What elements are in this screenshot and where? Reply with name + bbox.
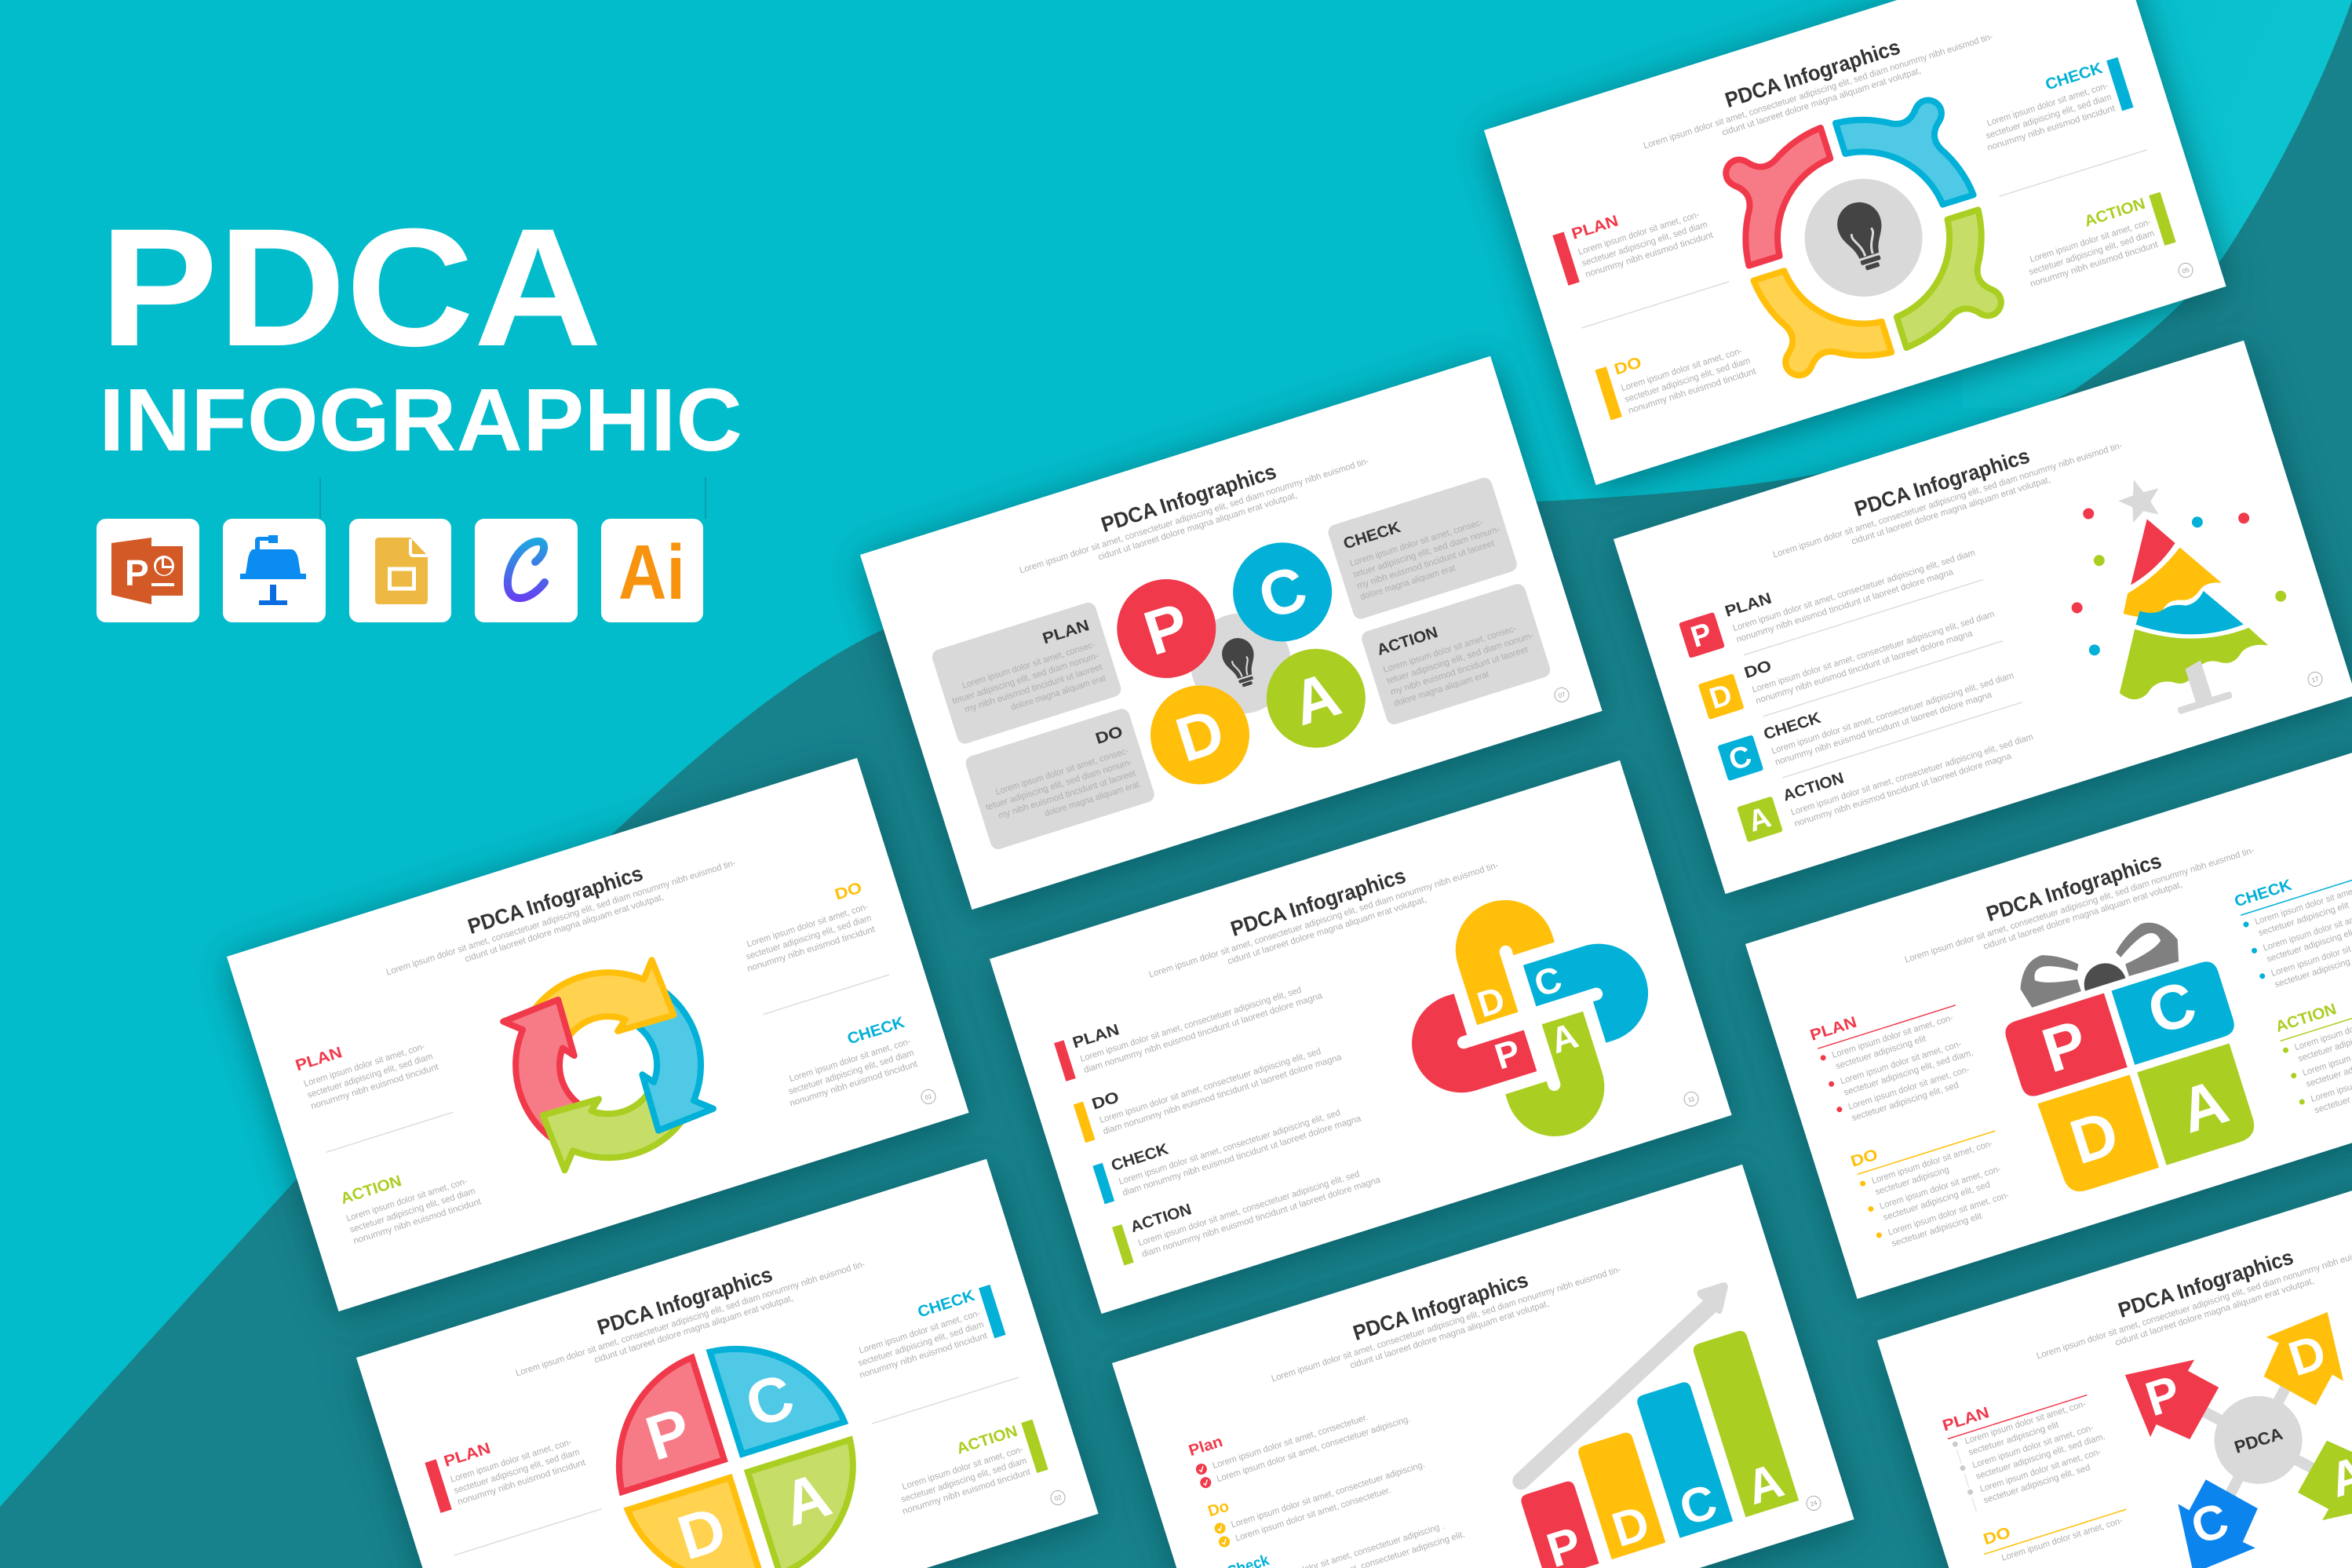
page number: 11	[1687, 1095, 1696, 1103]
slide intro text: Lorem ipsum dolor sit amet, consectetuer adipiscing elit, sed diam nonummy nibh euismod tin-	[515, 1260, 866, 1378]
block: do: DO	[1090, 1088, 1121, 1114]
block: check: sectetuer adipiscing elit	[2257, 901, 2350, 938]
block: action: Lorem ipsum dolor sit amet, con-	[345, 1176, 469, 1223]
panel: slide 02 pie	[356, 1159, 1099, 1568]
block: action	[338, 1151, 483, 1246]
block: action: Lorem ipsum dolor sit amet, con-	[2029, 217, 2152, 264]
block: check: Lorem ipsum dolor sit amet, con-	[788, 1037, 912, 1084]
block: plan	[930, 600, 1123, 746]
block: action: tetuer adipiscing elit, sed diam nonum-	[1386, 631, 1535, 686]
block: do: nonummy nibh euismod tincidunt	[1627, 366, 1758, 416]
block: check: Lorem ipsum dolor sit amet, con-	[858, 1309, 982, 1356]
knot diagram	[1377, 865, 1683, 1172]
block: action: sectetuer adipiscing elit, sed diam	[900, 1457, 1028, 1504]
hub diagram: C	[2185, 1493, 2235, 1555]
block: plan: Lorem ipsum dolor sit amet, consectetuer.	[1212, 1413, 1369, 1471]
circle A: A	[1284, 658, 1348, 738]
block: plan	[1677, 527, 1980, 660]
page number	[2306, 670, 2324, 688]
page number	[1049, 1489, 1067, 1507]
subtitle: INFOGRAPHIC	[99, 370, 742, 469]
block: plan: Plan	[1187, 1433, 1225, 1460]
block: do	[1073, 1021, 1344, 1143]
block: plan: sectetuer adipiscing elit, sed diam,	[1843, 1048, 1975, 1098]
block: plan: Lorem ipsum dolor sit amet, con-	[450, 1438, 573, 1485]
block: plan: Lorem ipsum dolor sit amet, con-	[1831, 1013, 1954, 1060]
knot diagram: D	[1472, 979, 1510, 1025]
block: do: D	[1705, 678, 1736, 716]
block: plan: P	[1687, 617, 1716, 655]
block: action: Lorem ipsum dolor sit amet, consectetuer adipiscing elit, sed	[1137, 1169, 1361, 1248]
background: lighter top right swoosh	[1962, 0, 2352, 408]
block: plan: sectetuer adipiscing elit, sed	[1982, 1463, 2091, 1505]
divider	[1782, 702, 2022, 779]
block: action: dolore magna aliquam erat	[1393, 669, 1490, 709]
hub diagram: PDCA	[2232, 1424, 2285, 1457]
block: action: my nibh euismod tincidunt ut laoreet	[1389, 645, 1530, 698]
block: do: DO	[833, 879, 864, 904]
block: plan: sectetuer adipiscing elit, sed diam	[1581, 220, 1708, 268]
block: plan: Lorem ipsum dolor sit amet, con-	[1577, 210, 1701, 257]
slide heading: PDCA Infographics	[1228, 864, 1409, 941]
block: plan: Lorem ipsum dolor sit amet, con-	[1840, 1039, 1963, 1086]
panel: slide 01 arrows	[227, 758, 969, 1311]
slide heading: PDCA Infographics	[1852, 444, 2033, 521]
block: check: CHECK	[1109, 1140, 1171, 1175]
block: action: nonummy nibh euismod tincidunt	[2029, 240, 2160, 289]
slide intro text: cidunt ut laoreet dolore magna aliquam erat volutpat,	[1982, 880, 2183, 952]
gift illustration: A	[2171, 1066, 2236, 1147]
circle D	[1138, 673, 1262, 797]
block: plan	[1941, 1373, 2115, 1513]
circle A	[1254, 636, 1378, 760]
block: check	[844, 1282, 1006, 1380]
block: action: nonummy nibh euismod tincidunt	[352, 1197, 483, 1246]
gift illustration: C	[2140, 968, 2204, 1048]
block: action: sectetuer adipiscing elit, sed diam	[2028, 229, 2156, 277]
block: do: Lorem ipsum dolor sit amet, con-	[1620, 346, 1744, 393]
block: action: ACTION	[1781, 769, 1846, 805]
block: action: sectetuer adipiscing elit, sed diam	[348, 1187, 476, 1235]
block: do: dolore magna aliquam erat	[1043, 780, 1141, 819]
slide intro text: cidunt ut laoreet dolore magna aliquam erat volutpat,	[1097, 490, 1298, 563]
divider	[1744, 579, 1983, 655]
block: plan: sectetuer adipiscing elit, sed	[1851, 1081, 1960, 1123]
icon: Keynote	[223, 519, 326, 622]
block: plan: Lorem ipsum dolor sit amet, consectetuer adipiscing.	[1216, 1414, 1412, 1484]
slide intro text: Lorem ipsum dolor sit amet, consectetuer adipiscing elit, sed diam nonummy nibh euismod tin-	[1772, 441, 2124, 560]
block: action: Lorem ipsum dolor sit amet, con-	[901, 1445, 1024, 1492]
arrow cycle diagram	[492, 949, 724, 1181]
block: plan	[1187, 1377, 1412, 1490]
slide heading: PDCA Infographics	[595, 1263, 775, 1340]
block: action: ACTION	[2274, 1001, 2339, 1036]
block: action	[2274, 976, 2352, 1119]
block: check	[1326, 476, 1519, 621]
block: do	[1595, 322, 1758, 421]
block: plan	[424, 1413, 587, 1513]
panel: slide 07 circles	[860, 356, 1603, 910]
block: action: ACTION	[2082, 195, 2147, 231]
block: plan: PLAN	[1570, 213, 1621, 243]
block: plan: Lorem ipsum dolor sit amet, con-	[1971, 1424, 2095, 1471]
block: do: DO	[1612, 354, 1643, 379]
block: check	[2233, 850, 2352, 994]
block: check: Lorem ipsum dolor sit amet, con-	[1986, 82, 2110, 129]
block: check	[1225, 1493, 1466, 1568]
block: do: diam nonummy nibh euismod tincidunt ut laoreet dolore magna	[1102, 1052, 1344, 1136]
bar chart: C	[1673, 1475, 1723, 1537]
slide heading: PDCA Infographics	[1984, 849, 2164, 926]
block: do: sectetuer adipiscing	[1874, 1165, 1950, 1197]
bar chart: A	[1740, 1453, 1790, 1515]
knot diagram: C	[1530, 958, 1566, 1005]
circle D: D	[1168, 695, 1232, 775]
main title: PDCA	[100, 194, 602, 381]
divider left	[454, 1508, 602, 1556]
block: plan: nonummy nibh euismod tincidunt ut laoreet dolore magna	[1735, 567, 1955, 644]
page number	[1553, 686, 1570, 704]
block: check: Lorem ipsum dolor sit amet, consectetuer adipiscing elit, sed diam	[1770, 671, 2015, 757]
block: check: dolore magna aliquam erat	[1359, 563, 1457, 602]
block: plan: Lorem ipsum dolor sit amet, con-	[1979, 1447, 2102, 1494]
block: do: tetuer adipiscing elit, sed diam nonum-	[985, 757, 1133, 812]
block: check: CHECK	[1341, 519, 1403, 552]
block: do: DO	[1982, 1524, 2013, 1548]
block: action: Lorem ipsum dolor sit amet, consec-	[1382, 624, 1518, 675]
block: do: Lorem ipsum dolor sit amet, consec-	[994, 746, 1130, 797]
block: plan: sectetuer adipiscing elit, sed diam.	[1975, 1432, 2106, 1482]
block: check: nonummy nibh euismod tincidunt	[859, 1331, 989, 1380]
pie diagram: A	[775, 1459, 839, 1539]
slide intro text: Lorem ipsum dolor sit amet, consectetuer adipiscing elit, sed diam nonummy nibh euismod tin-	[1904, 846, 2255, 965]
block: action: diam nonummy nibh euismod tincidunt ut laoreet dolore magna	[1141, 1175, 1382, 1260]
block: plan: Lorem ipsum dolor sit amet, con-	[303, 1042, 426, 1089]
block: plan: sectetuer adipiscing elit, sed diam	[306, 1052, 434, 1100]
block: do: Lorem ipsum dolor sit amet, consectetuer adipiscing elit, sed	[1099, 1047, 1322, 1125]
block: plan: sectetuer adipiscing elit, sed diam	[453, 1447, 581, 1496]
block: plan: Lorem ipsum dolor sit amet, consec-	[961, 640, 1096, 691]
slide heading: PDCA Infographics	[1099, 460, 1279, 537]
slide intro text: Lorem ipsum dolor sit amet, consectetuer adipiscing elit, sed diam nonummy nibh euismod tin-	[1271, 1265, 1622, 1384]
page number	[920, 1088, 937, 1106]
page number: 17	[2311, 675, 2320, 684]
block: do	[1205, 1438, 1431, 1549]
block: check: C	[1725, 739, 1756, 778]
hub diagram: D	[2283, 1325, 2332, 1387]
page number: 24	[1810, 1499, 1818, 1508]
panel: slide hub	[1877, 1142, 2352, 1568]
slide intro text: Lorem ipsum dolor sit amet, consectetuer adipiscing elit, sed diam nonummy nibh euismod tin-	[385, 859, 737, 977]
block: plan: dolore magna aliquam erat	[1010, 673, 1107, 713]
gift illustration: P	[2034, 1007, 2095, 1086]
block: do: Lorem ipsum dolor sit amet, consectetuer adipiscing elit, sed diam	[1751, 610, 1996, 695]
block: action: ACTION	[1129, 1201, 1194, 1236]
block: check: CHECK	[845, 1014, 907, 1048]
block: plan	[294, 1017, 440, 1112]
slide intro text: cidunt ut laoreet dolore magna aliquam erat volutpat,	[2114, 1276, 2315, 1348]
icon: PowerPoint: P	[125, 552, 149, 593]
gear ring diagram	[1716, 90, 2011, 385]
knot diagram: A	[1545, 1015, 1583, 1061]
panel: slide 11 knot	[990, 760, 1732, 1314]
block: check: Lorem ipsum dolor sit amet, consectetuer adipiscing elit, sed	[1118, 1108, 1341, 1187]
pie diagram: C	[738, 1360, 802, 1441]
divider right	[871, 1377, 1019, 1424]
faint vertical line right	[705, 477, 706, 519]
block: plan: diam nonummy nibh euismod tincidunt ut laoreet dolore magna	[1083, 991, 1324, 1075]
gift illustration	[1986, 906, 2269, 1200]
block: action	[1111, 1143, 1382, 1266]
slide intro text: cidunt ut laoreet dolore magna aliquam erat volutpat,	[1721, 66, 1922, 138]
block: plan: Lorem ipsum dolor sit amet, con-	[1847, 1065, 1971, 1112]
slide heading: PDCA Infographics	[465, 862, 646, 939]
block: check: diam nonummy nibh euismod tincidunt ut laoreet dolore magna	[1121, 1114, 1362, 1198]
block: check: CHECK	[916, 1287, 977, 1322]
divider	[1763, 640, 2003, 717]
block: do: my nibh euismod tincidunt ut laoreet	[997, 768, 1138, 821]
block: check: my nibh euismod tincidunt ut laoreet	[1356, 538, 1497, 591]
block: plan	[1552, 186, 1715, 286]
circle P: P	[1136, 589, 1197, 669]
block: do: Lorem ipsum dolor sit amet, con-	[746, 903, 870, 950]
circle C: C	[1250, 552, 1315, 633]
block: do	[1849, 1110, 2020, 1253]
page number	[2177, 261, 2194, 279]
block: plan	[1053, 960, 1324, 1081]
panel: slide 05 gear ring	[1484, 0, 2226, 485]
block: do: sectetuer adipiscing elit, sed	[1882, 1180, 1991, 1223]
block: action	[888, 1417, 1048, 1516]
block: do: Lorem ipsum dolor sit amet, con-	[1879, 1165, 2002, 1212]
block: check: sectetuer adipiscing elit, sed diam	[787, 1048, 915, 1096]
circle P	[1104, 567, 1228, 691]
block: do	[1978, 1489, 2131, 1568]
bar chart	[1492, 1329, 1800, 1568]
center bulb	[1178, 600, 1304, 727]
page number: 02	[1054, 1493, 1063, 1503]
block: action	[1735, 712, 2038, 844]
icon: PowerPoint	[97, 519, 199, 622]
block: check: nonummy nibh euismod tincidunt	[1986, 104, 2117, 153]
block: check	[1716, 650, 2018, 782]
block: do: sectetuer adipiscing elit	[1891, 1212, 1984, 1249]
block: do: sectetuer adipiscing elit, sed diam	[745, 913, 873, 962]
panel: slide 24 bars	[1112, 1165, 1854, 1568]
block: do: nonummy nibh euismod tincidunt ut laoreet dolore magna	[1755, 629, 1975, 706]
panel: slide 17 tree	[1614, 341, 2352, 894]
block: do	[731, 879, 877, 974]
block: do: nonummy nibh euismod tincidunt	[746, 924, 877, 974]
slide intro text: cidunt ut laoreet dolore magna aliquam erat volutpat,	[1349, 1299, 1550, 1371]
block: check: CHECK	[2044, 60, 2105, 94]
slide intro text: Lorem ipsum dolor sit amet, consectetuer adipiscing elit, sed diam nonummy nibh euismod tin-	[1148, 861, 1500, 979]
faint vertical line left	[319, 477, 321, 519]
block: plan: Lorem ipsum dolor sit amet, consectetuer adipiscing elit, sed diam	[1732, 549, 1976, 633]
icon: Illustrator: Ai	[618, 529, 685, 615]
slide intro text: Lorem ipsum dolor sit amet, consectetuer adipiscing elit, sed diam nonummy nibh euismod tin-	[1019, 457, 1370, 575]
pie diagram	[590, 1320, 882, 1568]
block: do	[1697, 589, 1999, 721]
block: plan: PLAN	[1041, 617, 1092, 647]
block: action: ACTION	[339, 1172, 403, 1208]
hub diagram	[2125, 1311, 2352, 1568]
block: action	[1360, 582, 1552, 726]
page number: 07	[1558, 691, 1566, 700]
block: check: nonummy nibh euismod tincidunt ut laoreet dolore magna	[1774, 690, 1993, 768]
slide intro text: cidunt ut laoreet dolore magna aliquam erat volutpat,	[593, 1293, 794, 1366]
block: action: ACTION	[1375, 624, 1440, 659]
block: plan: nonummy nibh euismod tincidunt	[1584, 231, 1715, 279]
divider right	[1999, 149, 2147, 197]
block: action: ACTION	[954, 1423, 1019, 1458]
divider left	[326, 1112, 453, 1153]
block: plan: Lorem ipsum dolor sit amet, con-	[1964, 1399, 2088, 1446]
icon: Illustrator	[601, 519, 703, 622]
slide intro text: cidunt ut laoreet dolore magna aliquam erat volutpat,	[464, 892, 665, 965]
hub diagram: P	[2139, 1366, 2186, 1427]
block: plan: PLAN	[1070, 1021, 1121, 1052]
block: do: DO	[1093, 723, 1125, 748]
panel: slide gift	[1745, 746, 2352, 1299]
block: check: CHECK	[2233, 877, 2294, 910]
block: do: Lorem ipsum dolor sit amet, consectetuer.	[1234, 1486, 1392, 1544]
block: plan: PLAN	[1808, 1014, 1859, 1045]
block: check: tetuer adipiscing elit, sed diam nonum-	[1352, 525, 1501, 580]
block: plan: sectetuer adipiscing elit	[1967, 1420, 2061, 1457]
block: plan: PLAN	[442, 1440, 493, 1471]
block: do: Lorem ipsum dolor sit amet, consectetuer adipiscing.	[1230, 1460, 1426, 1530]
block: action: Lorem ipsum dolor sit amet, consectetuer adipiscing elit, sed diam	[1790, 732, 2034, 818]
block: plan: nonummy nibh euismod tincidunt	[310, 1062, 440, 1111]
knot diagram: P	[1490, 1031, 1525, 1078]
block: plan: sectetuer adipiscing elit	[1835, 1034, 1927, 1071]
block: plan: nonummy nibh euismod tincidunt	[457, 1458, 587, 1507]
block: action: A	[1745, 800, 1775, 839]
block: check: sectetuer adipiscing elit, sed diam	[857, 1320, 985, 1369]
block: check	[1092, 1082, 1362, 1204]
circle C	[1220, 530, 1344, 654]
pie diagram: P	[638, 1395, 699, 1474]
block: do: Do	[1205, 1497, 1231, 1520]
slide heading: PDCA Infographics	[1723, 35, 1903, 112]
divider right	[764, 974, 889, 1015]
block: check: Lorem ipsum dolor sit amet, consec-	[1349, 518, 1484, 568]
block: check: CHECK	[1762, 709, 1823, 743]
block: do: sectetuer adipiscing elit, sed diam	[1624, 356, 1752, 405]
icon: Canva	[475, 519, 578, 622]
page number: 01	[924, 1092, 933, 1102]
slide intro text: Lorem ipsum dolor sit amet, consectetuer adipiscing elit, sed diam nonummy nibh euismod tin-	[1643, 32, 1994, 151]
block: check: nonummy nibh euismod tincidunt	[789, 1059, 919, 1109]
block: action	[2015, 190, 2176, 289]
slide heading: PDCA Infographics	[2116, 1245, 2296, 1322]
block: plan: PLAN	[294, 1044, 345, 1074]
tree illustration	[2040, 447, 2310, 736]
page number	[1683, 1090, 1700, 1108]
page number	[1805, 1494, 1822, 1512]
block: plan: PLAN	[1723, 590, 1774, 621]
block: action: nonummy nibh euismod tincidunt	[902, 1468, 1032, 1516]
divider left	[1581, 281, 1730, 329]
block: plan: tetuer adipiscing elit, sed diam nonum-	[951, 651, 1100, 706]
bar chart: D	[1606, 1496, 1656, 1558]
block: plan: my nibh euismod tincidunt ut laoreet	[964, 662, 1104, 715]
block: do: Lorem ipsum dolor sit amet, con-	[1871, 1139, 1994, 1186]
block: action: nonummy nibh euismod tincidunt ut laoreet dolore magna	[1793, 752, 2013, 829]
block: do: Lorem ipsum dolor sit amet, con-	[2000, 1516, 2124, 1563]
block: check: sectetuer adipiscing elit, sed diam	[1985, 93, 2113, 141]
slide intro text: cidunt ut laoreet dolore magna aliquam erat volutpat,	[1227, 895, 1428, 967]
block: do	[964, 707, 1156, 851]
slide intro text: cidunt ut laoreet dolore magna aliquam erat volutpat,	[1851, 475, 2051, 547]
block: do: DO	[1849, 1146, 1880, 1171]
block: check	[1972, 54, 2134, 153]
block: do: Lorem ipsum dolor sit amet, con-	[1887, 1191, 2011, 1238]
page number: 05	[2182, 266, 2190, 275]
icon: Google Slides	[349, 519, 451, 622]
block: check	[775, 1014, 919, 1109]
slide heading: PDCA Infographics	[1351, 1268, 1531, 1345]
block: do: DO	[1742, 658, 1774, 682]
block: plan: Lorem ipsum dolor sit amet, consectetuer adipiscing elit, sed	[1079, 986, 1303, 1064]
growth arrow	[1482, 1282, 1765, 1481]
block: plan	[1808, 983, 1982, 1128]
gift illustration: D	[2062, 1097, 2127, 1177]
block: plan: PLAN	[1941, 1404, 1991, 1435]
